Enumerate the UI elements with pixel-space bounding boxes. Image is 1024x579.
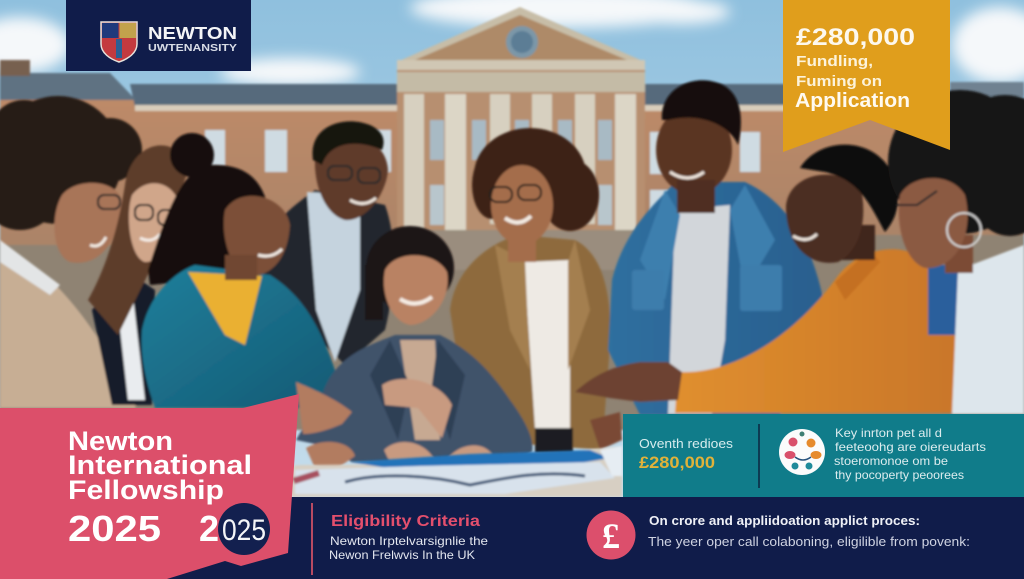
curly-haired woman, tan blazer xyxy=(450,128,610,453)
title: Newton xyxy=(68,426,173,456)
portico xyxy=(397,7,645,270)
funding ribbon: Application xyxy=(795,90,910,112)
woman in black blazer with glasses xyxy=(88,145,190,405)
panel: eligibility criteria: Newon Frelwvis In the UK xyxy=(329,548,475,562)
funding ribbon xyxy=(783,0,950,152)
icon: university crest xyxy=(101,22,137,62)
funding ribbon: £280,000 xyxy=(796,24,915,51)
panel: eligibility criteria: Newton Irptelvarsignlie the xyxy=(330,534,488,548)
logo wordmark: NEWTON xyxy=(148,23,237,43)
right wing xyxy=(637,82,1024,235)
reaching hands at left xyxy=(296,382,352,434)
key information text xyxy=(834,426,986,482)
title: 2025 xyxy=(68,508,161,549)
panel: application process: On crore and appliidoation applict proces: xyxy=(649,514,920,528)
title xyxy=(68,426,252,549)
panel: eligibility criteria: Eligibility Criteria xyxy=(331,513,480,530)
title: Fellowship xyxy=(68,475,224,505)
bottom navy band xyxy=(160,497,1024,579)
table with papers and folders xyxy=(290,446,622,497)
funding figure xyxy=(639,437,733,472)
icon: collaboration circle xyxy=(779,429,825,475)
man in orange sweater xyxy=(575,145,960,413)
woman in far-left sweater xyxy=(0,96,142,408)
key information text: feeteoohg are oiereudarts xyxy=(835,440,986,454)
woman in teal sweater xyxy=(142,133,340,408)
icon: pound sign: £ xyxy=(602,516,620,556)
funding figure: £280,000 xyxy=(639,454,715,472)
title banner xyxy=(0,394,299,579)
logo banner xyxy=(66,0,251,71)
group of students xyxy=(0,80,1024,470)
logo wordmark xyxy=(148,23,237,54)
man in denim jacket xyxy=(608,80,828,415)
man with glasses, dark blazer (back) xyxy=(248,121,394,365)
university building xyxy=(0,7,1024,430)
funding figure: Oventh redioes xyxy=(639,437,733,451)
panel: eligibility criteria xyxy=(311,503,488,575)
key information text: Key inrton pet all d xyxy=(835,426,942,440)
title: 2 xyxy=(199,508,219,549)
panel: application process xyxy=(586,510,970,560)
icon: pound sign xyxy=(586,510,636,560)
pointing hand xyxy=(575,362,682,402)
title: International xyxy=(68,450,252,480)
logo wordmark: UWTENANSITY xyxy=(148,42,237,54)
key information text: thy pocoperty peoorees xyxy=(835,468,964,482)
funding ribbon: Fuming on xyxy=(796,73,882,90)
key information text: stoeromonoe om be xyxy=(834,454,948,468)
courtyard xyxy=(0,230,1024,430)
funding ribbon: Fundling, xyxy=(796,53,873,70)
left wing xyxy=(0,60,400,245)
seated woman's hands xyxy=(382,379,452,438)
seated woman in grey-blue blazer xyxy=(296,226,622,470)
year badge: 025 xyxy=(222,514,266,547)
woman at far right, white shirt xyxy=(888,90,1024,414)
year badge xyxy=(218,503,270,555)
teal information panel xyxy=(623,414,1024,497)
panel: application process: The yeer oper call colaboning, eligilible from povenk: xyxy=(648,534,970,549)
